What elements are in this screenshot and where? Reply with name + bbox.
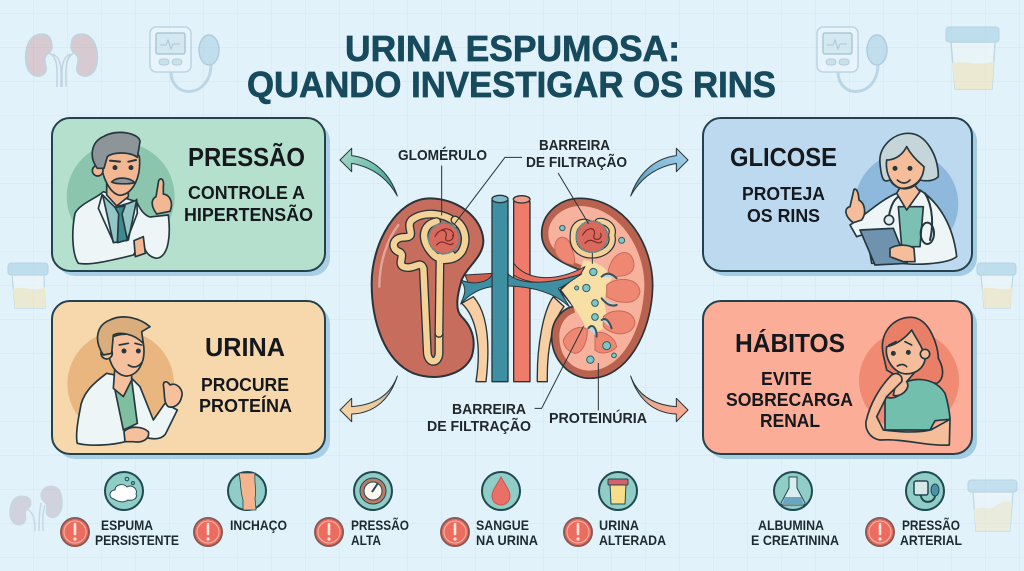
label: barreira de filtração top: BARREIRA: [539, 137, 610, 154]
protein dots: [560, 225, 625, 363]
glomerulus with capsule: [573, 221, 612, 255]
label: urina alterada: URINA: [599, 517, 639, 533]
label: inchaço: INCHAÇO: [230, 517, 287, 533]
panel: glicose: [703, 118, 977, 276]
faint icon: blood pressure monitor left: [150, 27, 219, 91]
right kidney: [542, 198, 653, 378]
nephron tubule: [394, 214, 465, 361]
label: pressão arterial: [900, 516, 962, 548]
arrow: to glicose: [631, 148, 688, 196]
text: PROCURE: [201, 375, 289, 395]
alert icon: [61, 518, 89, 546]
text: OS RINS: [747, 206, 820, 226]
label: urina alterada: ALTERADA: [599, 532, 666, 548]
alert icon: [441, 518, 469, 546]
alerts row: [61, 518, 894, 546]
label: barreira de filtração bottom: DE FILTRAÇÃO: [427, 417, 531, 435]
label: barreira de filtração top: DE FILTRAÇÃO: [526, 153, 627, 171]
alert icon: [194, 518, 222, 546]
label: sangue na urina: SANGUE: [476, 517, 529, 533]
arrow: to urina: [340, 376, 397, 422]
panel: hábitos: [703, 301, 977, 459]
faint icon: kidneys bottom left: [10, 486, 62, 531]
arrow: to hábitos: [631, 376, 688, 422]
label: glomérulo: GLOMÉRULO: [398, 147, 487, 164]
blue and red vessels: [461, 195, 585, 382]
panel: pressão: [52, 118, 330, 276]
label: espuma persistente: [95, 517, 179, 548]
text: [184, 183, 313, 225]
label: pressão arterial: PRESSÃO: [902, 516, 960, 533]
label: sangue na urina: [476, 517, 538, 548]
label: albumina e creatinina: [751, 517, 839, 548]
diagram: kidneys: [340, 148, 688, 422]
text: PROTEÍNA: [199, 395, 292, 416]
label: pressão alta: ALTA: [351, 532, 381, 548]
label: espuma persistente: ESPUMA: [101, 517, 153, 533]
illustration: young doctor thumbs up: [67, 317, 182, 445]
left kidney: [372, 198, 483, 377]
heading: URINA: [205, 332, 285, 362]
label: pressão alta: PRESSÃO: [351, 516, 409, 533]
pelvis: [562, 260, 612, 331]
faint icon: urine cup top right: [946, 27, 999, 89]
arrow: to pressão: [340, 148, 397, 196]
label: pressão alta: [351, 516, 409, 548]
alert icon: [564, 518, 592, 546]
alert icon: [866, 518, 894, 546]
illustration: female doctor with clipboard: [846, 133, 958, 265]
text: EVITE: [761, 369, 812, 389]
label: barreira de filtração bottom: BARREIRA: [452, 401, 526, 418]
illustration: male doctor pointing: [67, 132, 175, 264]
faint icon: urine cup right: [977, 263, 1016, 308]
text: SOBRECARGA: [726, 390, 853, 410]
heading: GLICOSE: [730, 142, 837, 172]
text: CONTROLE A: [188, 183, 305, 203]
panel: urina: [52, 301, 330, 459]
label: albumina e creatinina: E CREATININA: [751, 532, 839, 548]
icon: pressure gauge: [354, 472, 392, 510]
ureters: [462, 297, 564, 382]
text: [742, 184, 825, 226]
title: QUANDO INVESTIGAR OS RINS: [247, 64, 776, 105]
label: barreira de filtração top: [526, 137, 627, 171]
alert icon: [315, 518, 343, 546]
illustration: worried woman: [859, 317, 959, 445]
text: [726, 369, 853, 431]
pyramids: [555, 237, 640, 353]
icon: urine cup: [599, 472, 637, 510]
glomerulus: [429, 223, 459, 254]
text: [199, 375, 292, 416]
icon: foam: [105, 472, 143, 510]
text: PROTEJA: [742, 184, 825, 204]
text: HIPERTENSÃO: [184, 204, 313, 225]
faint icon: urine cup left: [8, 263, 48, 308]
label: barreira de filtração bottom: [427, 401, 531, 435]
heading: PRESSÃO: [188, 142, 305, 172]
label: espuma persistente: PERSISTENTE: [95, 532, 179, 548]
label: sangue na urina: NA URINA: [476, 532, 538, 548]
heading: HÁBITOS: [735, 328, 845, 358]
text: RENAL: [760, 411, 820, 431]
faint icon: urine cup bottom right: [968, 480, 1017, 531]
label: albumina e creatinina: ALBUMINA: [758, 517, 824, 533]
icon: swollen leg: [228, 472, 266, 510]
label: pressão arterial: ARTERIAL: [900, 532, 962, 548]
label: urina alterada: [599, 517, 666, 548]
icon: sphygmomanometer: [906, 472, 944, 510]
label: proteinúria: PROTEINÚRIA: [549, 409, 647, 427]
icon: blood drop: [482, 472, 520, 510]
leader lines: [442, 157, 598, 410]
title: [247, 28, 776, 105]
faint icon: blood pressure monitor right: [817, 27, 887, 91]
title: URINA ESPUMOSA:: [345, 28, 680, 69]
calyx caps: [588, 274, 617, 337]
faint icon: kidneys top left: [26, 34, 97, 87]
icon: flask: [774, 472, 812, 510]
